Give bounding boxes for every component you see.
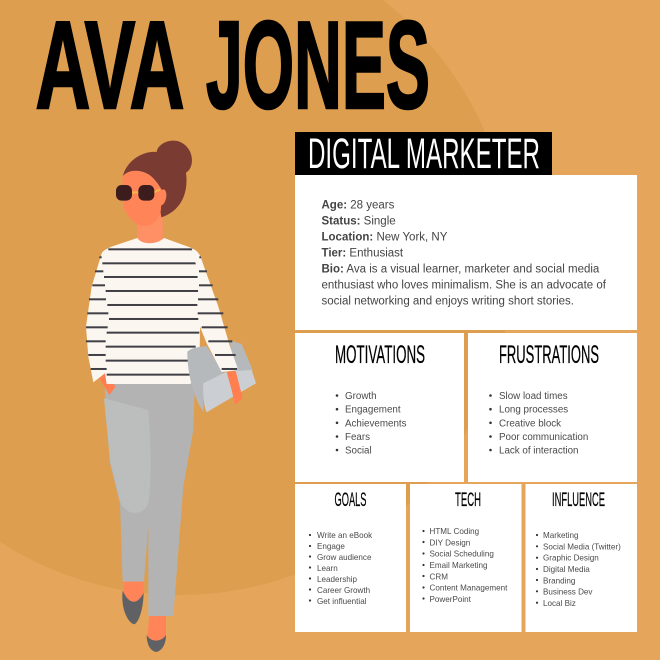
panel: frustrations: Creative block (499, 418, 561, 429)
panel: bio (295, 175, 637, 330)
panel: goals: Grow audience (317, 553, 372, 562)
title: AVA (36, 0, 184, 135)
panel: goals: Engage (317, 542, 345, 551)
panel: bio: Location: New York, NY (322, 232, 448, 244)
panel: influence (526, 484, 637, 632)
panel: influence: Local Biz (543, 599, 576, 608)
panel: goals: Leadership (317, 575, 358, 584)
panel: tech: PowerPoint (430, 595, 472, 604)
panel: influence: Business Dev (543, 588, 593, 597)
panel: goals (295, 484, 406, 632)
panel: bio: Bio: Ava is a visual learner, marketer and social media (322, 264, 600, 276)
panel: frustrations: Long processes (499, 405, 568, 416)
panel: motivations: Achievements (345, 418, 407, 429)
neck and head (122, 141, 192, 244)
panel: influence: Social Media (Twitter) (543, 542, 621, 551)
trousers (104, 378, 195, 616)
feet and shoes (122, 582, 166, 652)
panel: influence: Branding (543, 576, 575, 585)
panel: frustrations: Slow load times (499, 391, 568, 402)
panel: bio: Age: 28 years (322, 200, 395, 212)
left hand (99, 373, 116, 395)
striped shirt torso (86, 238, 202, 384)
panel: tech: Social Scheduling (430, 550, 494, 559)
panel: tech: HTML Coding (430, 527, 479, 536)
sunglasses (116, 185, 160, 201)
panel: goals: Career Growth (317, 586, 370, 595)
title: JONES (206, 0, 430, 135)
panel: motivations: Social (345, 446, 372, 457)
bag (187, 341, 256, 412)
panel: goals: Write an eBook (317, 531, 373, 540)
panel: frustrations (468, 333, 637, 482)
panel: motivations: Fears (345, 432, 370, 443)
panel: bio: Status: Single (322, 216, 396, 228)
panel: goals: Get influential (317, 597, 367, 606)
panel: motivations: Engagement (345, 405, 401, 416)
panel: tech: DIY Design (430, 538, 470, 547)
panel: tech: Email Marketing (430, 561, 488, 570)
panel: frustrations: Poor communication (499, 432, 588, 443)
panel: influence: Digital Media (543, 565, 590, 574)
panel: tech: CRM (430, 572, 448, 581)
panel: influence: Marketing (543, 531, 579, 540)
panel: influence: Graphic Design (543, 554, 599, 563)
job title banner (295, 130, 552, 178)
title (36, 0, 430, 135)
panel: motivations: MOTIVATIONS (335, 342, 425, 369)
panel: tech: Content Management (430, 584, 508, 593)
illustration: woman with bag (86, 141, 256, 652)
panel: bio: enthusiast who loves minimalism. She is an advocate of (322, 280, 607, 292)
panel: goals: GOALS (334, 490, 366, 511)
panel: tech: TECH (455, 490, 481, 511)
panel: tech (410, 484, 522, 632)
panel: motivations: Growth (345, 391, 377, 402)
panel: motivations (295, 333, 464, 482)
panel: frustrations: Lack of interaction (499, 446, 579, 457)
panel: bio: social networking and enjoys writing short stories. (322, 296, 574, 308)
panel: goals: Learn (317, 564, 338, 573)
right sleeve (192, 248, 238, 372)
panel: influence: INFLUENCE (552, 490, 605, 511)
panel: bio: Tier: Enthusiast (322, 248, 404, 260)
right hand (227, 371, 243, 405)
